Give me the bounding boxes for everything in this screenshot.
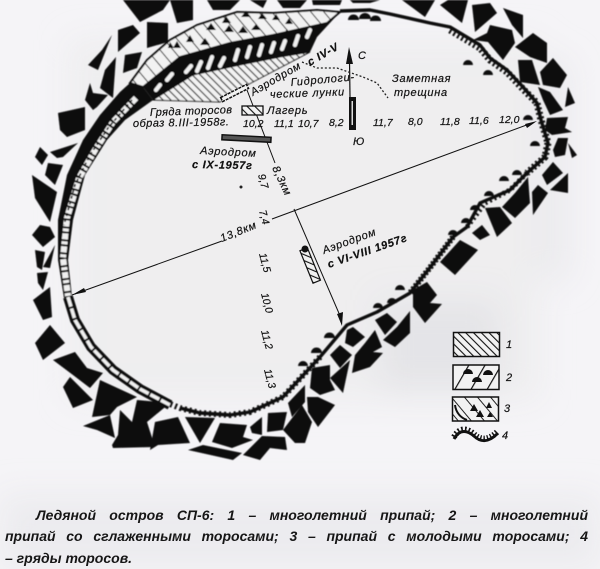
caption: Ледяной остров СП-6: 1 – многолетний припай; 2 – многолетний	[36, 507, 588, 523]
depth measurements: 9,7	[255, 173, 271, 191]
legend	[452, 332, 513, 442]
small domed hummocks	[298, 13, 540, 366]
map labels: с VI-VIII 1957г	[326, 232, 409, 271]
legend item 3: 3	[504, 403, 511, 415]
map labels: 8,3км	[269, 164, 293, 198]
map labels: С	[358, 50, 367, 62]
ice blocks around the island	[32, 0, 577, 460]
map labels: Аэродром	[320, 226, 378, 257]
legend item 2: 2	[505, 372, 513, 384]
crack	[302, 62, 388, 98]
length line 8.3 km	[247, 90, 343, 326]
map labels: с IX-1957г	[192, 159, 253, 172]
map labels: Заметная	[392, 73, 451, 85]
zone 2: smoothed hummocks	[143, 12, 340, 100]
depth measurements: 11,3	[261, 368, 278, 390]
depth measurements: 12,0	[499, 114, 520, 126]
map labels: образ 8.III-1958г.	[133, 116, 229, 130]
depth measurements: 11,2	[258, 329, 275, 351]
depth measurements: 8,0	[408, 116, 423, 128]
depth measurements: 10,0	[258, 292, 275, 315]
airfield strips	[221, 84, 320, 283]
map labels: Гряда торосов	[150, 104, 233, 119]
depth measurements: 10,2	[243, 118, 264, 130]
depth measurements: 11,8	[440, 116, 460, 128]
map labels: ческие лунки	[270, 86, 345, 101]
width line 13.8 km	[72, 121, 537, 295]
depth measurements: 10,7	[298, 118, 320, 130]
map labels: трещина	[394, 87, 448, 99]
zone 3 triangles	[168, 11, 293, 48]
map labels	[133, 41, 451, 271]
map labels: Гидрологи-	[290, 71, 355, 89]
map labels: с IV-V	[306, 41, 342, 69]
shore ridges	[170, 10, 548, 415]
legend item 1: 1	[506, 339, 513, 351]
map labels: 13,8км	[219, 219, 259, 245]
island map	[32, 0, 577, 460]
depth measurements: 11,1	[274, 118, 294, 130]
caption: припай со сглаженными торосами; 3 – припай с молодыми торосами; 4	[5, 528, 588, 544]
caption	[5, 507, 588, 566]
map labels: Ю	[353, 136, 365, 148]
legend item 4: 4	[502, 430, 509, 442]
caption: – гряды торосов.	[5, 550, 132, 566]
depth measurements: 11,7	[373, 117, 394, 129]
zone 1: multi-year fast ice	[153, 52, 310, 102]
depth measurements	[243, 114, 520, 390]
map labels: Аэродром	[199, 145, 257, 160]
north-south arrow	[346, 47, 356, 130]
depth measurements: 8,2	[329, 117, 344, 129]
zone 2 white patches	[156, 30, 310, 90]
depth measurements: 7,4	[256, 209, 272, 226]
left shore band	[58, 83, 170, 405]
map labels: Аэродром	[248, 60, 303, 99]
depth measurements: 11,5	[256, 252, 273, 274]
map labels: Лагерь	[266, 105, 308, 117]
zone 3: fast ice with young hummocks	[130, 10, 340, 87]
depth measurements: 11,6	[469, 115, 489, 127]
